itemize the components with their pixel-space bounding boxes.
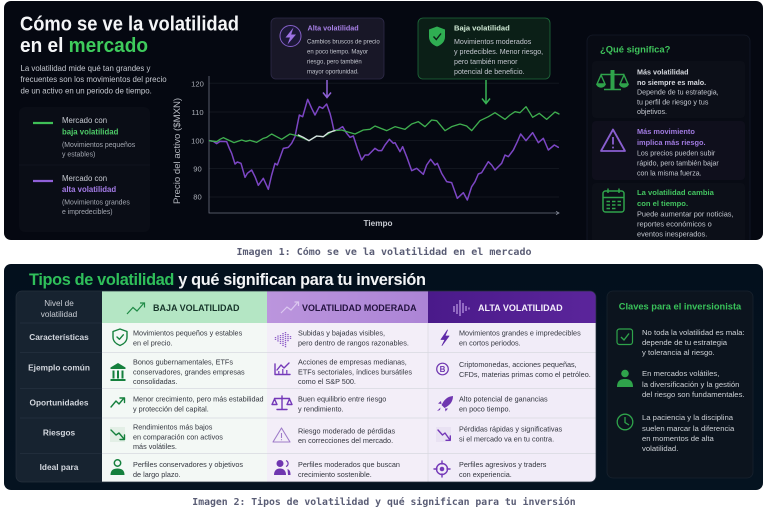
- purple series: alta volatilidad: [209, 99, 558, 200]
- legend: baja volatilidad: y estables): [62, 152, 95, 158]
- column: alta volatilidad cells: Alto potencial de ganancias: [459, 394, 548, 404]
- column: baja volatilidad cells: Bonos gubernamentales, ETFs: [133, 358, 233, 366]
- key: no toda la volatilidad es mala: [617, 328, 745, 357]
- column: alta volatilidad cells: Pérdidas rápidas y significativas: [459, 424, 563, 434]
- row labels: Características: [29, 332, 89, 342]
- icon: escudo: [113, 329, 127, 346]
- icon: objetivo: [434, 461, 450, 477]
- callout: alta volatilidad: en poco tiempo. Mayor: [307, 50, 368, 56]
- column header: baja volatilidad: BAJA VOLATILIDAD: [153, 303, 240, 313]
- legend: alta volatilidad: (Movimientos grandes: [62, 200, 130, 206]
- column: baja volatilidad cells: Menor crecimiento, pero más estabilidad: [133, 394, 264, 404]
- intro text: de un activo en un periodo de tiempo.: [20, 86, 152, 96]
- icon: reloj: [617, 414, 633, 430]
- legend: [19, 107, 150, 232]
- panel: qué significa: [587, 35, 750, 250]
- icon: balanza: [272, 396, 292, 410]
- row labels: Oportunidades: [29, 398, 89, 408]
- card: más volatilidad: Depende de tu estrategia,: [637, 88, 719, 96]
- column: baja volatilidad cells: más volátiles.: [133, 442, 177, 451]
- icon: advertencia: [273, 428, 290, 442]
- card: más movimiento: [600, 128, 719, 176]
- column: volatilidad moderada cells: Riesgo moderado de pérdidas: [298, 426, 396, 436]
- legend: baja volatilidad: Mercado con: [62, 116, 107, 125]
- row labels: Nivel de: [44, 299, 74, 308]
- key: mercados volátiles: del riesgo son fundamentales.: [642, 390, 745, 399]
- column: volatilidad moderada cells: en correcciones del mercado.: [298, 436, 393, 445]
- column: volatilidad moderada cells: Buen equilibrio entre riesgo: [298, 394, 386, 404]
- icon: bitcoin: [437, 363, 448, 375]
- column: alta volatilidad cells: en poco tiempo.: [459, 404, 511, 414]
- icon: rayo: [441, 330, 449, 346]
- y axis labels: 80: [193, 192, 202, 202]
- column: volatilidad moderada cells: Subidas y bajadas visibles,: [298, 328, 385, 338]
- panel: cómo se ve la volatilidad: [4, 1, 763, 250]
- callout: baja volatilidad: Baja volatilidad: [454, 24, 510, 32]
- icon: lightning bolt: [280, 26, 301, 46]
- heading: qué significa: ¿Qué significa?: [600, 44, 671, 54]
- callout: alta volatilidad: riesgo, pero también: [307, 60, 362, 66]
- column: alta volatilidad cells: Criptomonedas, acciones pequeñas,: [459, 360, 577, 369]
- column: alta volatilidad cells: [434, 328, 591, 479]
- arrow: hacia alta volatilidad: [323, 80, 331, 98]
- column: volatilidad moderada cells: Perfiles moderados que buscan: [298, 460, 400, 469]
- column header: alta volatilidad: ALTA VOLATILIDAD: [478, 303, 563, 313]
- x axis label: Tiempo: [364, 219, 392, 228]
- column: baja volatilidad cells: conservadores, grandes empresas: [133, 368, 245, 376]
- card: más movimiento: con la misma fuerza.: [637, 170, 702, 178]
- column header: baja volatilidad: [127, 303, 240, 314]
- callout: baja volatilidad: potencial de beneficio.: [454, 68, 525, 76]
- card: más volatilidad: [596, 69, 718, 116]
- column: baja volatilidad cells: consolidadas.: [133, 377, 177, 386]
- icon: cohete: [437, 396, 453, 412]
- row labels: Ejemplo común: [28, 362, 90, 372]
- y axis labels: 90: [193, 164, 202, 174]
- column: volatilidad moderada cells: Acciones de empresas medianas,: [298, 358, 407, 366]
- column: volatilidad moderada cells: ETFs sectoriales, índices bursátiles: [298, 368, 412, 376]
- callout: alta volatilidad: Cambios bruscos de precio: [307, 40, 380, 46]
- column: baja volatilidad cells: en comparación con activos: [133, 432, 223, 442]
- icon: bitcoin: B: [440, 365, 446, 374]
- icon: balanza: [597, 70, 628, 90]
- column: alta volatilidad cells: con experiencia.: [459, 470, 512, 479]
- key: no toda la volatilidad es mala: No toda la volatilidad es mala:: [642, 328, 745, 337]
- icon: casilla marcada: [617, 329, 632, 344]
- column header: alta volatilidad: [454, 300, 563, 316]
- legend: baja volatilidad: [33, 116, 136, 158]
- title: cómo se ve la volatilidad: Cómo se ve la volatilidad: [20, 14, 239, 36]
- column: volatilidad moderada cells: pero dentro de rangos razonables.: [298, 338, 409, 348]
- icon: tendencia a la baja: [110, 427, 125, 442]
- title: cómo se ve la volatilidad: en el mercado: [20, 35, 148, 57]
- arrow: hacia baja volatilidad: [482, 80, 490, 104]
- column: alta volatilidad cells: si el mercado va en tu contra.: [459, 434, 554, 444]
- card: cambia con el tiempo: con el tiempo.: [637, 199, 688, 208]
- callout: baja volatilidad: [418, 18, 550, 79]
- green series: baja volatilidad: [209, 107, 559, 143]
- legend: baja volatilidad: (Movimientos pequeños: [62, 142, 136, 149]
- icon: gráfico de barras: [275, 363, 290, 374]
- row labels: volatilidad: [41, 310, 78, 319]
- card: más volatilidad: Más volatilidad: [637, 68, 689, 76]
- column: baja volatilidad cells: de largo plazo.: [133, 470, 181, 479]
- caption 1: Imagen 1: Cómo se ve la volatilidad en el mercado: [236, 246, 532, 258]
- column: alta volatilidad cells: en cortos periodos.: [459, 338, 521, 348]
- intro text: La volatilidad mide qué tan grandes y: [20, 64, 151, 73]
- callout: alta volatilidad: [271, 18, 384, 79]
- callout: baja volatilidad: pero también menor: [454, 58, 518, 66]
- key: mercados volátiles: [617, 369, 745, 399]
- icon: calendario: [603, 188, 624, 212]
- column: alta volatilidad cells: Perfiles agresivos y traders: [459, 460, 547, 469]
- icon: advertencia: [601, 130, 625, 151]
- icon: shield check: [429, 26, 445, 46]
- icon: personas: [274, 460, 290, 475]
- card: cambia con el tiempo: eventos inesperados.: [637, 230, 707, 238]
- icon: ondas de precio: [276, 332, 290, 348]
- icon: tendencia al alza: [111, 398, 124, 407]
- line chart: precio del activo: [172, 76, 559, 228]
- callout: alta volatilidad: mayor oportunidad.: [307, 70, 359, 76]
- icon: caída: [436, 427, 451, 442]
- white overlap segment: [298, 131, 335, 141]
- card: cambia con el tiempo: Puede aumentar por noticias,: [637, 210, 734, 218]
- column: volatilidad moderada cells: crecimiento sostenible.: [298, 470, 372, 479]
- card: cambia con el tiempo: La volatilidad cambia: [637, 188, 715, 197]
- key: paciencia y disciplina: en momentos de alta: [642, 434, 715, 443]
- column: baja volatilidad cells: Rendimientos más bajos: [133, 422, 213, 432]
- column: volatilidad moderada cells: y rendimiento.: [298, 404, 344, 414]
- key: mercados volátiles: la diversificación y la gestión: [642, 380, 739, 389]
- column: baja volatilidad cells: y protección del capital.: [133, 404, 209, 414]
- heading: claves: Claves para el inversionista: [619, 302, 742, 312]
- key: no toda la volatilidad es mala: y tolerancia al riesgo.: [642, 348, 715, 357]
- panel: tipos de volatilidad: [4, 264, 763, 490]
- card: cambia con el tiempo: [602, 188, 733, 238]
- panel: claves para el inversionista: [607, 291, 753, 478]
- legend: alta volatilidad: e impredecibles): [62, 209, 113, 216]
- row labels: [28, 299, 90, 472]
- card: más volatilidad: tu perfil de riesgo y tus: [637, 98, 709, 106]
- y axis labels: 110: [191, 108, 204, 117]
- card: cambia con el tiempo: reportes económicos o: [637, 220, 712, 228]
- column: volatilidad moderada cells: como el S&P 500.: [298, 377, 356, 386]
- card: más volatilidad: objetivos.: [637, 108, 667, 116]
- key: paciencia y disciplina: volatilidad.: [642, 444, 678, 453]
- y axis labels: 100: [191, 136, 204, 146]
- key: paciencia y disciplina: suelen marcar la diferencia: [642, 424, 735, 433]
- callout: baja volatilidad: Movimientos moderados: [454, 38, 532, 46]
- intro text: frecuentes son los movimientos del precio: [20, 75, 167, 84]
- icon: persona: [617, 370, 633, 387]
- card: más movimiento: implica más riesgo.: [637, 138, 706, 147]
- column: alta volatilidad cells: CFDs, materias primas como el petróleo.: [459, 370, 591, 379]
- title: tipos de volatilidad: Tipos de volatilidad y qué significan para tu inversión: [29, 271, 426, 289]
- key: paciencia y disciplina: La paciencia y la disciplina: [642, 413, 734, 422]
- key: mercados volátiles: En mercados volátiles,: [642, 369, 719, 378]
- card: más movimiento: Más movimiento: [637, 127, 695, 136]
- row labels: Riesgos: [43, 428, 76, 438]
- legend: alta volatilidad: [33, 174, 130, 216]
- key: paciencia y disciplina: [617, 413, 735, 453]
- callout: alta volatilidad: Alta volatilidad: [308, 24, 359, 32]
- column header: volatilidad moderada: VOLATILIDAD MODERADA: [302, 303, 417, 313]
- key: no toda la volatilidad es mala: depende de tu estrategia: [642, 338, 728, 347]
- column: baja volatilidad cells: en el precio.: [133, 338, 172, 348]
- y axis title: Precio del activo ($MXN): [172, 98, 183, 204]
- icon: persona: [110, 460, 124, 475]
- icon: banco: [110, 363, 126, 381]
- callout: baja volatilidad: y predecibles. Menor riesgo,: [454, 48, 543, 56]
- y axis labels: 120: [191, 80, 204, 88]
- legend: alta volatilidad: alta volatilidad: [62, 185, 116, 194]
- legend: baja volatilidad: baja volatilidad: [62, 128, 119, 136]
- column: baja volatilidad cells: Movimientos pequeños y estables: [133, 328, 243, 338]
- title: cómo se ve la volatilidad: [20, 14, 239, 57]
- card: más movimiento: Los precios pueden subir: [637, 150, 716, 158]
- column: volatilidad moderada cells: [272, 328, 412, 479]
- column: alta volatilidad cells: Movimientos grandes e impredecibles: [459, 328, 581, 338]
- card: más volatilidad: no siempre es malo.: [637, 78, 706, 87]
- row labels: Ideal para: [40, 462, 79, 472]
- legend: alta volatilidad: Mercado con: [62, 174, 107, 183]
- column: baja volatilidad cells: Perfiles conservadores y objetivos: [133, 460, 243, 469]
- caption 2: Imagen 2: Tipos de volatilidad y qué significan para tu inversión: [192, 496, 576, 508]
- comparison table: [16, 291, 596, 482]
- column: baja volatilidad cells: [110, 328, 264, 479]
- card: más movimiento: rápido, pero también bajar: [637, 160, 719, 168]
